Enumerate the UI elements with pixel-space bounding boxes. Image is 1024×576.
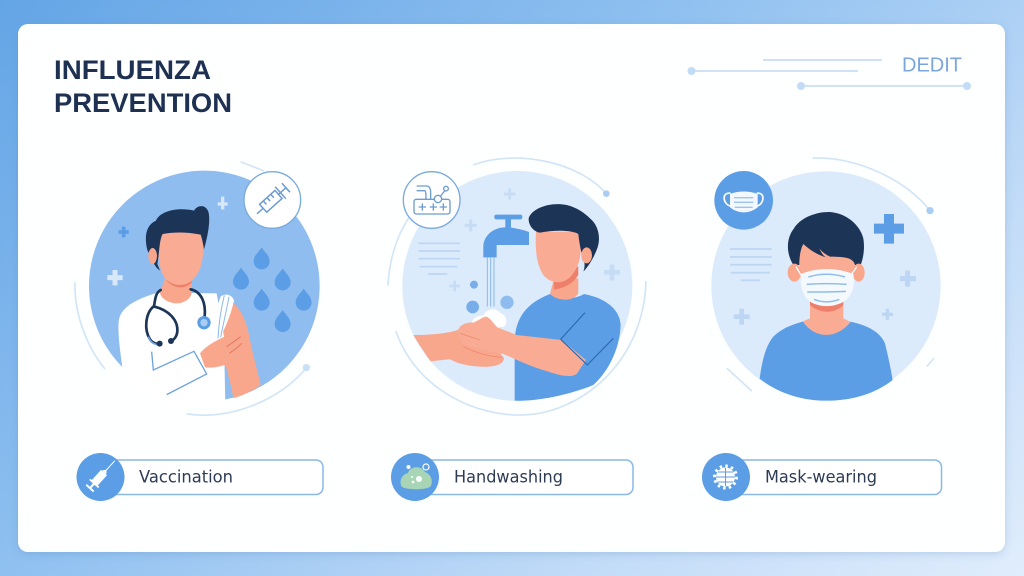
face [158, 232, 203, 285]
background circle [89, 171, 320, 401]
panel: mask-wearing illustration [711, 158, 941, 401]
label: Mask-wearing: Mask-wearing [765, 468, 877, 486]
header decoration with DEDIT label [688, 54, 971, 90]
small crosses [119, 227, 129, 237]
background circle [711, 171, 941, 401]
background circle [402, 171, 632, 401]
hair [529, 204, 599, 272]
hand [200, 331, 240, 368]
decorative arcs [75, 162, 306, 415]
hair [788, 212, 864, 265]
shirt [760, 321, 893, 401]
stethoscope [146, 289, 205, 344]
hair [146, 206, 209, 271]
face [536, 232, 581, 282]
text lines [418, 243, 460, 274]
ears [788, 264, 801, 282]
right arm and hand [458, 317, 586, 376]
mask badge [714, 171, 773, 230]
small crosses [449, 188, 620, 291]
decorative arcs [727, 158, 934, 391]
panel: handwashing illustration [388, 158, 646, 415]
face [799, 233, 855, 305]
title: INFLUENZA [54, 55, 211, 85]
water drops [233, 247, 312, 332]
doctor coat [118, 293, 225, 405]
label: Handwashing: Handwashing [454, 468, 563, 486]
neck [803, 297, 851, 335]
ear [581, 247, 592, 263]
mask [796, 267, 857, 306]
faucet badge [403, 172, 460, 228]
title: PREVENTION [54, 88, 232, 118]
arm [217, 298, 261, 398]
neck [550, 278, 578, 300]
decorative arcs [388, 158, 646, 415]
icon: syringe [85, 457, 119, 493]
label: Mask-wearing [702, 453, 942, 501]
shirt [515, 294, 621, 401]
text lines [730, 249, 772, 280]
title [54, 55, 232, 118]
sleeve band [215, 295, 234, 342]
neck [160, 278, 192, 303]
label: Vaccination [76, 453, 323, 501]
crosses [874, 214, 904, 244]
left arm and hand [413, 328, 504, 367]
sleeve seam [561, 313, 613, 365]
soap foam [472, 309, 506, 330]
bubbles [470, 281, 478, 289]
label: Vaccination: Vaccination [139, 468, 233, 486]
syringe badge [244, 172, 301, 228]
coat cuff and lapel [152, 351, 207, 395]
icon: soap bubbles [401, 464, 432, 489]
water stream [487, 257, 494, 307]
ear [148, 248, 157, 264]
label: Handwashing [391, 453, 633, 501]
header decoration with DEDIT label: DEDIT [902, 54, 962, 76]
panel: vaccination illustration [75, 162, 320, 415]
faucet [483, 215, 529, 257]
icon: virus gear [714, 466, 736, 488]
